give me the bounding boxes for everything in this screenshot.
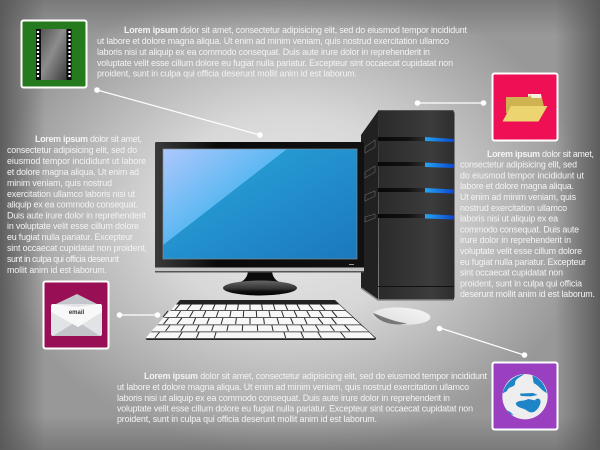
- text block: right: eu fugiat nulla pariatur. Excepteur: [460, 257, 586, 267]
- monitor screen: [163, 149, 357, 259]
- text block: left: mollit anim id est laborum.: [7, 265, 107, 275]
- text block: left: Lorem ipsum dolor sit amet,: [35, 134, 142, 144]
- text block: bottom: proident, sunt in culpa qui officia deserunt mollit anim id est laborum.: [117, 414, 377, 424]
- text block: left: et dolore magna aliqua. Ut enim ad: [7, 167, 139, 177]
- keyboard: [146, 300, 376, 340]
- connector: folder to tower: [415, 100, 486, 106]
- text block: top: [97, 25, 468, 78]
- text block: right: proident, sunt in culpa qui officia: [460, 278, 582, 288]
- mouse: [372, 306, 431, 326]
- text block: bottom: [117, 371, 488, 424]
- text block: bottom: Lorem ipsum dolor sit amet, consectetur adipisicing elit, sed do eiusmod tempor incididunt: [144, 371, 488, 381]
- text block: left: in voluptate velit esse cillum dolore: [7, 221, 139, 231]
- monitor frame: [155, 142, 364, 272]
- text block: left: eu fugiat nulla pariatur. Excepteur: [7, 232, 133, 242]
- icon: globe tile: [492, 362, 558, 430]
- text block: right: deserunt mollit anim id est laborum.: [460, 289, 595, 299]
- text block: left: [7, 134, 147, 275]
- text block: right: [460, 149, 595, 299]
- text block: right: Ut enim ad minim veniam, quis: [460, 192, 577, 202]
- icon: folder tile: [492, 74, 558, 140]
- text block: right: nostrud exercitation ullamco: [460, 203, 567, 213]
- text block: left: minim veniam, quis nostrud: [7, 178, 112, 188]
- icon: email tile: [44, 282, 108, 348]
- text block: right: laboris nisi ut aliquip ex ea: [460, 214, 558, 224]
- text block: right: do eiusmod tempor incididunt ut: [460, 170, 585, 180]
- connector: email to keyboard: [117, 312, 160, 318]
- text block: left: exercitation ullamco laboris nisi ut: [7, 189, 136, 199]
- text block: left: Duis aute irure dolor in reprehenderit: [7, 210, 147, 220]
- text block: top: Lorem ipsum dolor sit amet, consectetur adipisicing elit, sed do eiusmod tempor incididunt: [124, 25, 468, 35]
- monitor: [155, 142, 364, 296]
- text block: right: irure dolor in reprehenderit in: [460, 235, 571, 245]
- text block: bottom: ut labore et dolore magna aliqua. Ut enim ad minim veniam, quis nostrud exercitation ullamco: [117, 382, 469, 392]
- icon: email tile: email: [69, 310, 85, 316]
- text block: right: commodo consequat. Duis aute: [460, 224, 579, 234]
- text block: bottom: laboris nisi ut aliquip ex ea commodo consequat. Duis aute irure dolor in reprehenderit in: [117, 393, 450, 403]
- text block: left: aliquip ex ea commodo consequat.: [7, 200, 138, 210]
- text block: top: ut labore et dolore magna aliqua. Ut enim ad minim veniam, quis nostrud exercitation ullamco: [97, 36, 449, 46]
- monitor stand: [223, 270, 297, 296]
- text block: left: sunt in culpa qui officia deserunt: [7, 254, 120, 264]
- text block: top: laboris nisi ut aliquip ex ea commodo consequat. Duis aute irure dolor in reprehenderit in: [97, 47, 430, 57]
- tower: [361, 110, 454, 300]
- connector: film to monitor: [94, 87, 263, 138]
- text block: right: Lorem ipsum dolor sit amet,: [487, 149, 594, 159]
- text block: right: sint occaecat cupidatat non: [460, 268, 563, 278]
- text block: right: voluptate velit esse cillum dolore: [460, 246, 582, 256]
- text block: right: consectetur adipisicing elit, sed: [460, 160, 577, 170]
- text block: right: labore et dolore magna aliqua.: [460, 181, 574, 191]
- connector: mouse to globe: [437, 326, 527, 358]
- text block: left: sint occaecat cupidatat non proident,: [7, 243, 147, 253]
- text block: left: eiusmod tempor incididunt ut labore: [7, 156, 146, 166]
- text block: top: proident, sunt in culpa qui officia deserunt mollit anim id est laborum.: [97, 68, 357, 78]
- icon: film strip tile: [22, 20, 86, 88]
- text block: bottom: voluptate velit esse cillum dolore eu fugiat nulla pariatur. Excepteur sint occaecat cupidatat non: [117, 404, 473, 414]
- text block: left: consectetur adipisicing elit, sed do: [7, 145, 137, 155]
- text block: top: voluptate velit esse cillum dolore eu fugiat nulla pariatur. Excepteur sint occaecat cupidatat non: [97, 58, 453, 68]
